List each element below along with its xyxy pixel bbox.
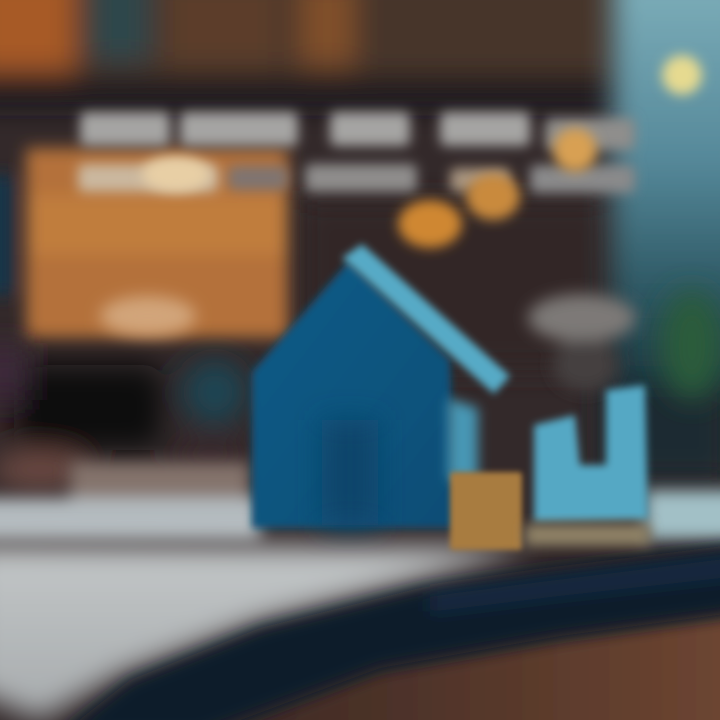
icon: gold coin block — [450, 472, 522, 550]
icon: house — [252, 244, 510, 528]
icon: light blue u-shaped block — [534, 385, 648, 522]
icon: base strip under blocks — [525, 524, 650, 546]
text block: blurred label on board — [100, 296, 196, 336]
panel: left orange board — [0, 148, 288, 338]
panel: dark left objects — [0, 345, 248, 490]
panel: wooden table — [200, 612, 720, 720]
icon: grey heart cluster — [528, 294, 636, 391]
panel: table surface — [0, 462, 720, 540]
icon: green plant — [660, 290, 720, 400]
icon: window light orb — [662, 55, 702, 95]
house side — [448, 398, 478, 480]
house roof edge — [342, 244, 510, 394]
text block: blurred white heading — [78, 112, 635, 193]
house door shadow — [322, 420, 378, 525]
icon: orange light orbs — [142, 128, 597, 248]
panel: open paper document — [0, 545, 530, 720]
house body — [252, 262, 456, 528]
panel: dark navy folder edge — [60, 545, 720, 720]
panel: right window — [600, 0, 720, 480]
panel: upper wall bokeh — [0, 0, 620, 370]
